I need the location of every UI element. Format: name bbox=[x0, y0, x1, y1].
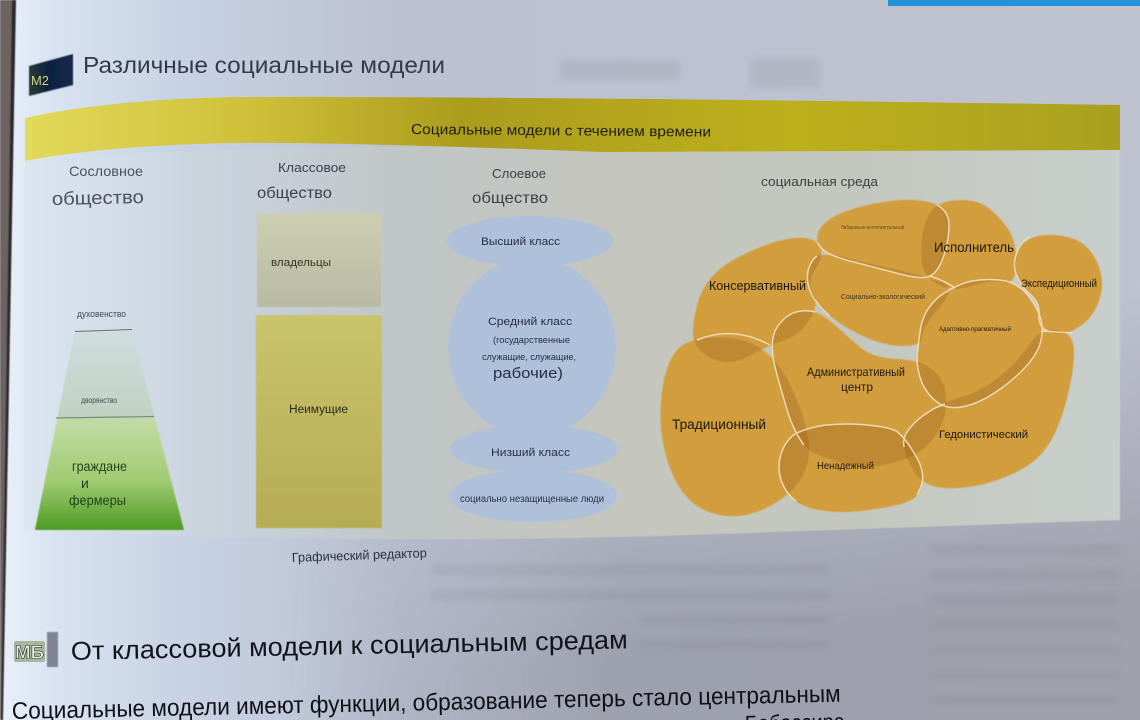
block: have-nots bbox=[256, 315, 382, 528]
heading: class society: общество bbox=[257, 185, 332, 202]
pyramid chart: духовенство bbox=[77, 309, 126, 319]
column: class society bbox=[256, 161, 382, 528]
blob labels: Ненадежный bbox=[817, 460, 874, 472]
top right blue bar bbox=[888, 0, 1140, 6]
heading: estate society: Сословное bbox=[69, 163, 143, 179]
pyramid chart: дворянство bbox=[81, 396, 117, 405]
blue layers diagram bbox=[447, 216, 618, 522]
section heading: От классовой модели к социальным средам bbox=[70, 624, 628, 666]
blob labels: центр bbox=[841, 380, 873, 394]
yellow timeline band bbox=[25, 97, 1120, 161]
section badge MB bbox=[14, 632, 58, 667]
heading: layered society: Слоевое bbox=[492, 166, 546, 181]
blue layers diagram: Высший класс bbox=[481, 236, 561, 248]
block: have-nots: Неимущие bbox=[289, 404, 348, 416]
blue layers diagram: рабочие) bbox=[493, 365, 563, 382]
section badge MB: МБ bbox=[15, 642, 44, 662]
column: layered society bbox=[447, 166, 618, 522]
block: owners: владельцы bbox=[271, 257, 331, 269]
section badge M2: М2 bbox=[31, 74, 49, 88]
blob labels: Либерально-интеллектуальный bbox=[841, 224, 904, 231]
blob chart: social milieus bbox=[660, 200, 1102, 516]
section badge M2 bbox=[29, 54, 73, 96]
page edge shadow bbox=[0, 0, 16, 720]
blob labels: Социально-экологический bbox=[841, 292, 925, 301]
panel: social models background bbox=[25, 147, 1120, 539]
heading: layered society: общество bbox=[472, 190, 548, 207]
blob labels: Исполнитель bbox=[934, 239, 1014, 255]
blob labels: Адаптивно-прагматичный bbox=[939, 325, 1011, 333]
heading: class society bbox=[257, 161, 346, 202]
blue layers diagram: (государственные bbox=[493, 335, 570, 346]
blob labels: Традиционный bbox=[672, 416, 766, 432]
blob labels: Гедонистический bbox=[939, 429, 1028, 441]
column: estate society bbox=[35, 163, 184, 530]
pyramid chart: и bbox=[81, 475, 89, 491]
heading: estate society: общество bbox=[52, 186, 144, 209]
caption: graphics editor: Графический редактор bbox=[292, 545, 427, 565]
main title: Различные социальные модели bbox=[83, 52, 445, 78]
blob labels: Административный bbox=[807, 365, 905, 379]
blob labels: Экспедиционный bbox=[1021, 278, 1097, 290]
heading: class society: Классовое bbox=[278, 161, 346, 175]
pyramid chart: фермеры bbox=[69, 492, 126, 508]
blue layers diagram: Низший класс bbox=[491, 447, 571, 459]
blue layers diagram: Средний класс bbox=[488, 316, 573, 328]
pyramid chart: граждане bbox=[72, 458, 127, 474]
heading: estate society bbox=[52, 163, 144, 209]
blue layers diagram: социально незащищенные люди bbox=[460, 493, 604, 505]
blue layers diagram: служащие, служащие, bbox=[482, 352, 576, 363]
pyramid chart bbox=[35, 309, 184, 530]
blob labels bbox=[672, 224, 1097, 472]
blob labels: Консервативный bbox=[709, 279, 806, 293]
yellow timeline band: Социальные модели с течением времени bbox=[411, 122, 711, 141]
heading: layered society bbox=[472, 166, 548, 207]
block: owners bbox=[257, 213, 381, 307]
heading: social milieu: социальная среда bbox=[761, 174, 879, 189]
